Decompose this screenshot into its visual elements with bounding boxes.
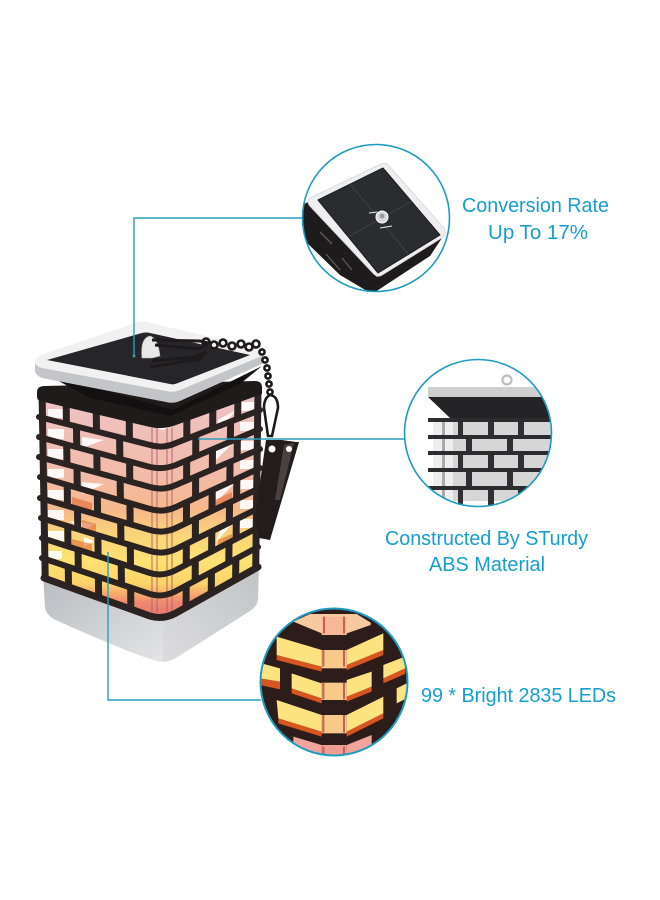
lid: [35, 322, 263, 403]
rails: [428, 418, 555, 490]
callout circle: solar panel detail: [300, 142, 452, 294]
hanging tag: [255, 440, 299, 540]
connector line: solar panel: [134, 218, 302, 357]
bars: [458, 421, 524, 508]
lantern base: [43, 565, 259, 662]
lantern glowing core: [44, 392, 256, 620]
hook: [376, 211, 388, 223]
solar panel: [47, 332, 250, 384]
pink bottom windows: [293, 735, 372, 755]
corner tubes: [322, 617, 347, 757]
brick bars: [42, 390, 258, 625]
connector line: ABS body: [198, 438, 405, 440]
orange under-glow: [260, 650, 405, 737]
label: constructed by sturdy: Constructed By STurdy: [385, 528, 588, 550]
yellow windows: [260, 633, 407, 732]
lid top: [35, 322, 262, 392]
lid rim: [35, 322, 263, 403]
lid: [428, 387, 553, 397]
top plate: [37, 381, 262, 428]
connector line: LEDs: [108, 552, 261, 700]
lantern body in circle: [302, 202, 442, 294]
rails: [39, 410, 260, 617]
callout circle: LED detail: [258, 606, 410, 758]
label: conversion rate: Conversion Rate: [462, 195, 609, 217]
hook: [502, 376, 512, 384]
solar panel in circle: [318, 168, 440, 273]
chain: [202, 338, 273, 395]
top row window: [293, 614, 371, 634]
lid underside: [42, 366, 262, 416]
windows: [453, 422, 551, 501]
hanging loop and carabiner: [142, 336, 208, 367]
white rim: [308, 163, 445, 276]
reference point dot: [132, 354, 136, 358]
label: ABS material: ABS Material: [429, 554, 545, 576]
lantern: [35, 322, 299, 662]
carabiner clip: [264, 395, 278, 436]
label: LEDs: 99 * Bright 2835 LEDs: [421, 685, 616, 707]
callout circle: body detail: [402, 358, 555, 510]
label: up to 17%: Up To 17%: [488, 222, 588, 244]
corner light tubes: [152, 428, 172, 612]
